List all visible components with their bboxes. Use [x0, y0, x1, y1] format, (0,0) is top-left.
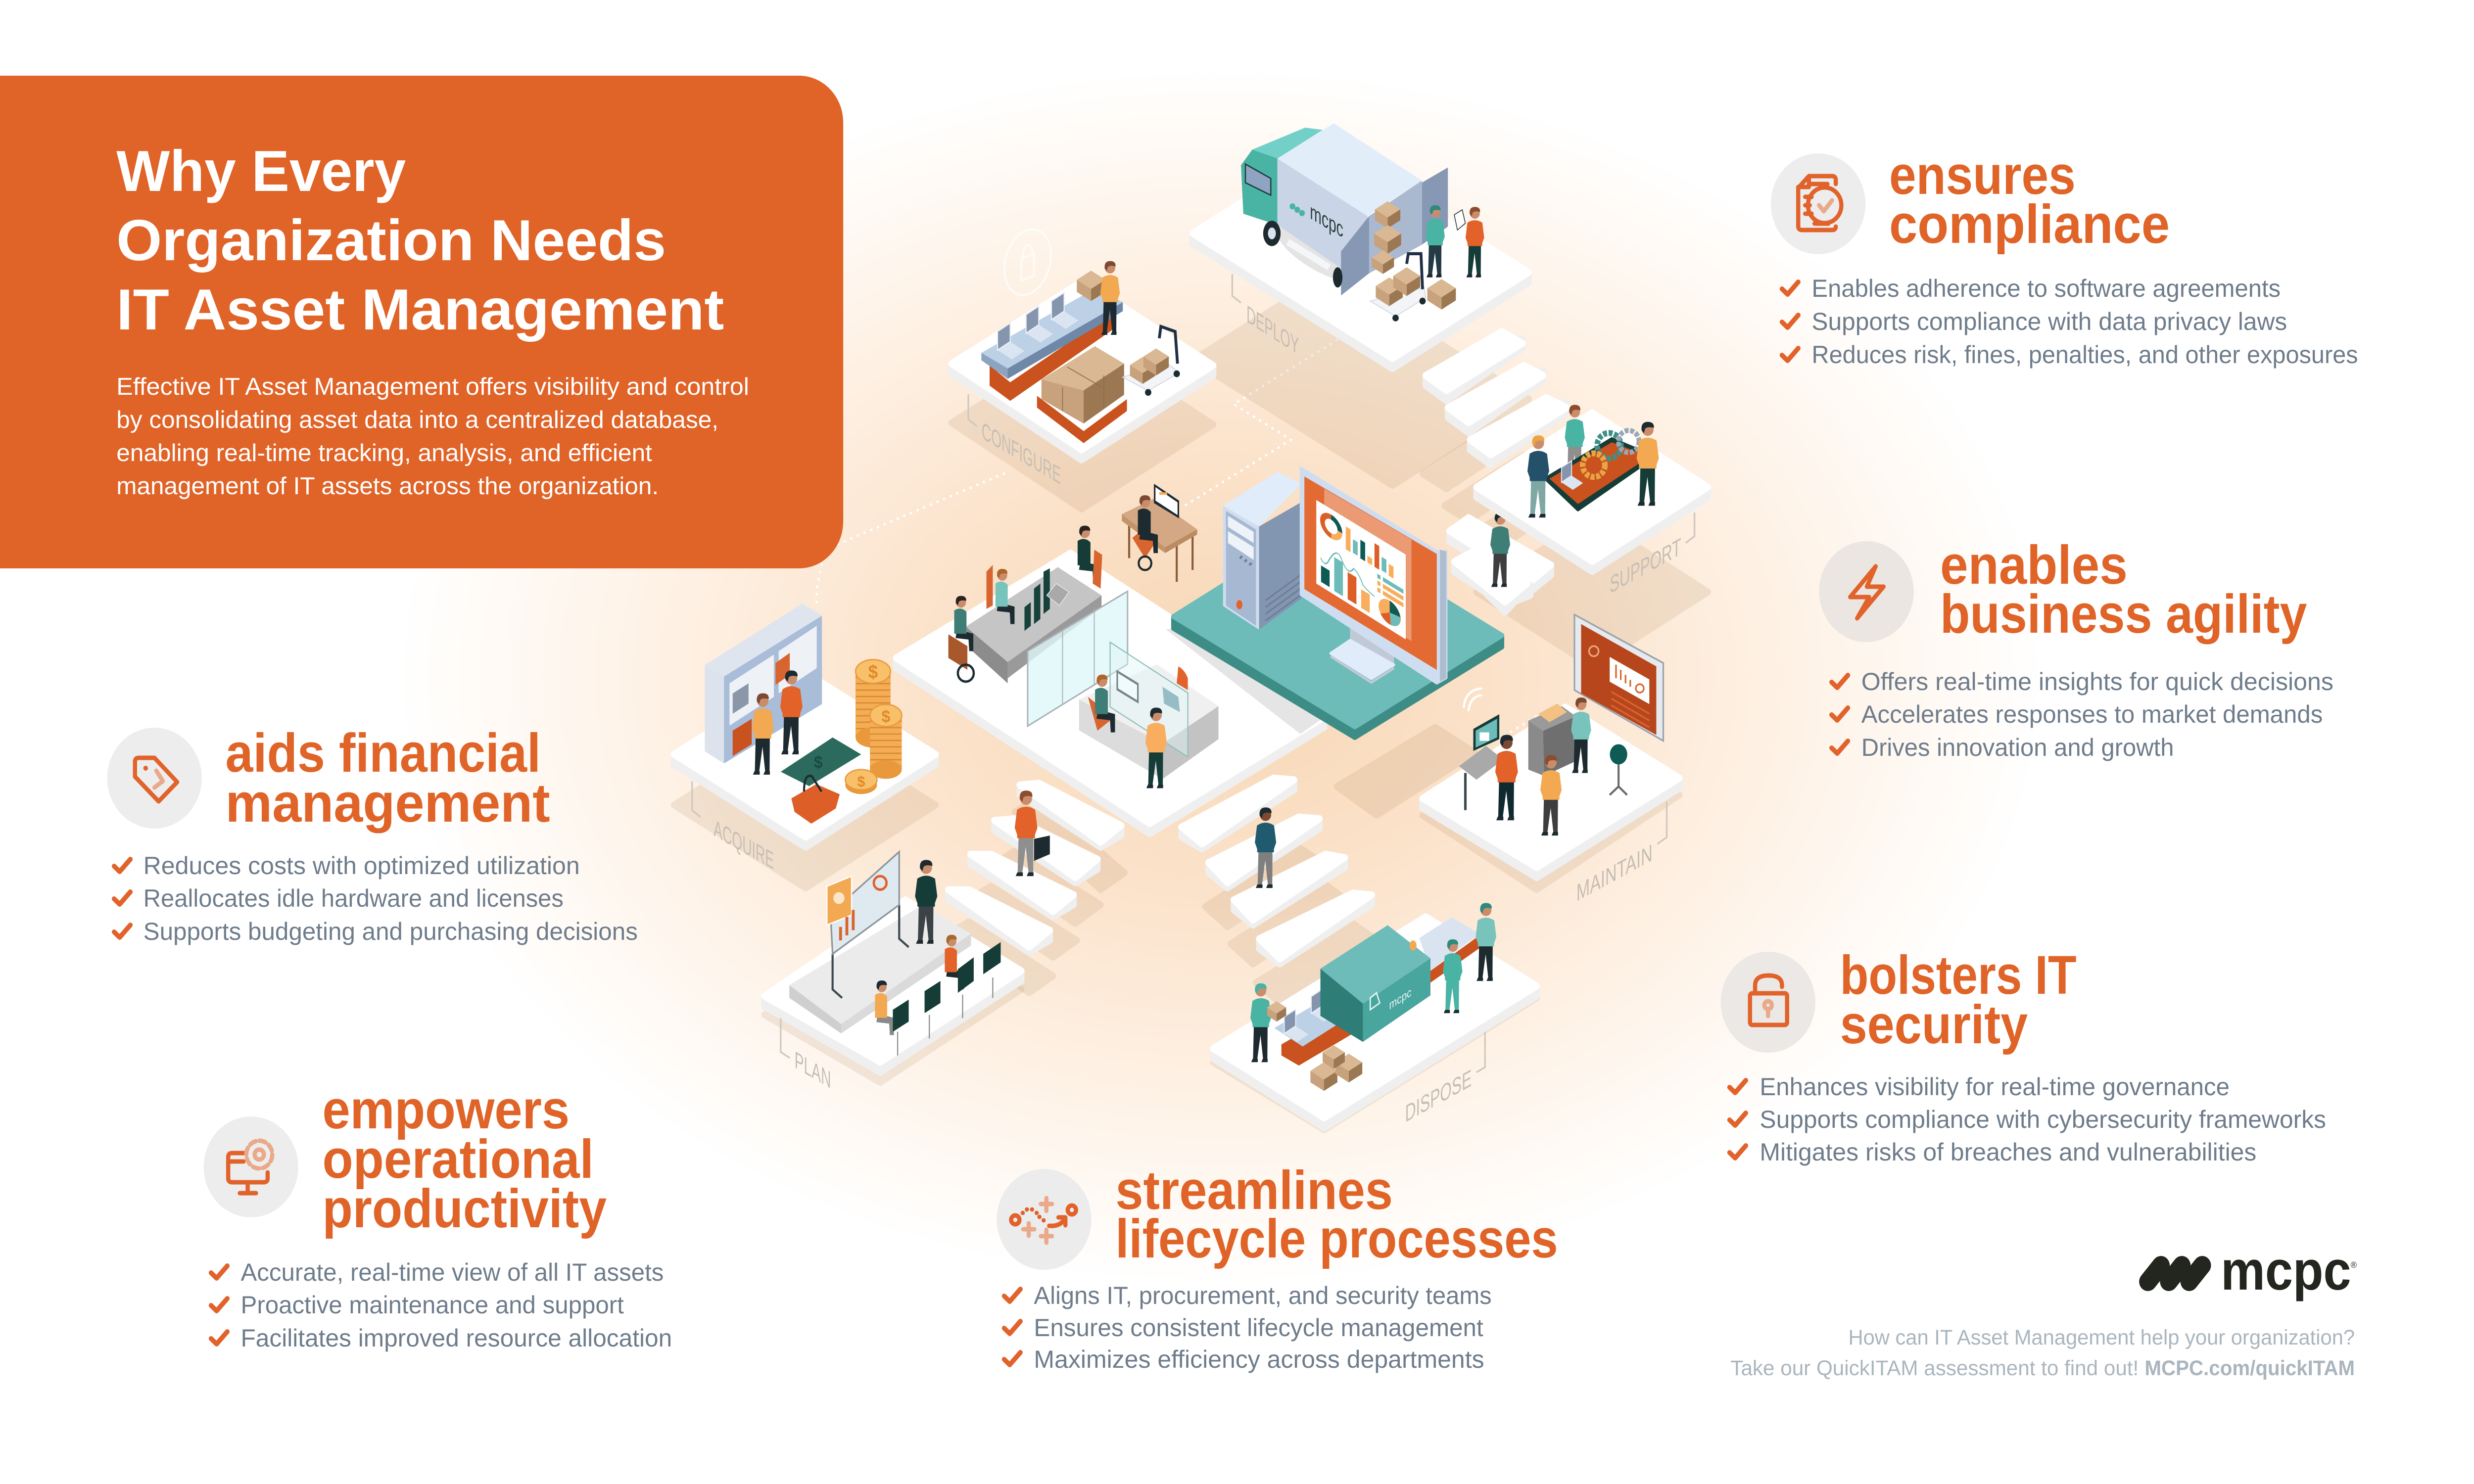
worker — [1100, 261, 1120, 335]
shared desk — [949, 526, 1102, 683]
output conveyor — [1420, 918, 1479, 983]
platform: office — [896, 484, 1324, 834]
panel: empowers operational productivity — [204, 1079, 672, 1352]
step label: support: SUPPORT — [1610, 533, 1681, 599]
heading — [1840, 944, 2077, 1055]
printer cabinet — [1528, 703, 1576, 776]
heading: bolsters IT — [1840, 944, 2077, 1006]
man behind tablet — [1565, 405, 1585, 480]
call to action: MCPC.com/quickITAM — [2144, 1356, 2355, 1380]
checklist: Proactive maintenance and support — [241, 1292, 624, 1319]
truck — [1241, 123, 1448, 295]
checklist: Ensures consistent lifecycle management — [1034, 1314, 1483, 1342]
call to action: How can IT Asset Management help your organization? — [1848, 1325, 2355, 1349]
checklist: Accelerates responses to market demands — [1861, 701, 2323, 728]
icon: process path — [997, 1169, 1092, 1270]
title: Why Every — [116, 139, 406, 204]
standing desk — [1459, 714, 1503, 810]
heading: compliance — [1889, 193, 2170, 255]
checklist: Facilitates improved resource allocation — [241, 1325, 672, 1352]
step label: maintain: MAINTAIN — [1576, 839, 1653, 907]
panel: bolsters IT security — [1721, 944, 2326, 1166]
title: Organization Needs — [116, 208, 666, 273]
checklist: Supports budgeting and purchasing decisions — [143, 918, 638, 945]
storage shelf — [705, 603, 822, 775]
heading — [1889, 144, 2170, 255]
reception desk — [1079, 642, 1218, 788]
title — [116, 139, 724, 342]
heading: lifecycle processes — [1115, 1208, 1558, 1269]
checklist: Enables adherence to software agreements — [1811, 275, 2281, 302]
wall display — [1574, 615, 1664, 741]
connecting dotted lines — [817, 340, 1546, 739]
audience seats — [875, 935, 1000, 1056]
platform: plan — [764, 852, 1021, 1072]
central server and monitor — [1174, 468, 1502, 738]
platform: support — [1476, 405, 1708, 572]
heading: aids financial — [226, 722, 541, 784]
checklist — [211, 1259, 672, 1352]
heading — [1940, 534, 2307, 645]
truck: mcpc — [1310, 198, 1343, 242]
icon: monitor and gear — [204, 1116, 298, 1217]
step label: configure — [968, 394, 1061, 490]
platform: maintain — [1423, 615, 1679, 878]
checklist: Drives innovation and growth — [1861, 734, 2174, 761]
heading: business agility — [1940, 583, 2307, 645]
wifi arcs — [1464, 689, 1481, 710]
panel: streamlines lifecycle processes — [997, 1159, 1558, 1373]
banknote and basket: $ — [814, 753, 823, 772]
hand cart — [1123, 326, 1180, 396]
step label: plan: PLAN — [795, 1046, 831, 1094]
checklist — [1730, 1073, 2326, 1166]
platform: dispose — [1213, 903, 1537, 1128]
step label: configure: CONFIGURE — [982, 417, 1061, 490]
icon: lightning bolt — [1819, 541, 1914, 642]
faint security icon — [997, 223, 1058, 302]
tablet with gears — [1546, 430, 1654, 510]
pallet of boxes — [1037, 346, 1127, 443]
heading: security — [1840, 994, 2028, 1055]
panel: intro — [0, 76, 843, 568]
coin stacks: $ — [868, 661, 878, 682]
hand cart with boxes — [1370, 254, 1456, 322]
step label: dispose: DISPOSE — [1405, 1064, 1472, 1128]
checklist: Reallocates idle hardware and licenses — [143, 885, 564, 912]
intro text: management of IT assets across the organization. — [116, 473, 659, 500]
logo: mcpc — [2148, 1240, 2357, 1302]
platform: configure — [952, 261, 1213, 460]
recycling machine — [1321, 925, 1430, 1042]
recycling workers — [1250, 903, 1496, 1062]
icon: open padlock — [1721, 952, 1815, 1053]
heading: productivity — [322, 1178, 607, 1239]
dashboard screen — [1304, 476, 1437, 670]
intro text — [116, 373, 749, 500]
recycling machine: mcpc — [1389, 985, 1412, 1013]
people — [1426, 205, 1484, 278]
icon: price tag — [107, 728, 202, 829]
teal base — [1174, 524, 1502, 738]
input conveyor — [1274, 981, 1358, 1066]
intro text: by consolidating asset data into a centralized database, — [116, 407, 718, 433]
icon: document with check — [1771, 153, 1865, 254]
glass partition — [1028, 591, 1128, 726]
banknote and basket — [781, 738, 861, 824]
team — [1527, 422, 1659, 517]
technicians — [1495, 697, 1591, 835]
checklist: Maximizes efficiency across departments — [1034, 1346, 1484, 1373]
wooden desk with monitor — [1122, 484, 1197, 582]
step label: acquire: ACQUIRE — [714, 814, 774, 875]
coin stacks: $ — [881, 707, 890, 726]
logo: mcpc: ® — [2351, 1259, 2357, 1270]
checklist — [1782, 275, 2358, 369]
step label: acquire — [692, 782, 774, 875]
checklist: Supports compliance with data privacy laws — [1811, 308, 2287, 335]
teal base floor shadow — [1166, 626, 1324, 734]
checklist — [1004, 1282, 1492, 1373]
call to action: Take our QuickITAM assessment to find out! — [1730, 1356, 2139, 1380]
heading: empowers — [322, 1079, 570, 1140]
checklist: Mitigates risks of breaches and vulnerabilities — [1760, 1139, 2256, 1166]
step label: deploy — [1232, 274, 1299, 360]
checklist — [1832, 668, 2333, 761]
heading: management — [226, 772, 550, 834]
checklist: Supports compliance with cybersecurity frameworks — [1760, 1106, 2326, 1133]
heading: operational — [322, 1128, 594, 1190]
platform shadows — [674, 274, 1708, 1130]
intro text: Effective IT Asset Management offers visibility and control — [116, 373, 749, 400]
panel: aids financial management — [107, 722, 638, 945]
step label: plan — [781, 1018, 831, 1094]
intro text: enabling real-time tracking, analysis, and efficient — [116, 440, 652, 466]
conveyor with laptops — [981, 271, 1123, 401]
logo: mcpc: mcpc — [2221, 1240, 2351, 1302]
panel: ensures compliance — [1771, 144, 2358, 369]
coin stacks: $ — [857, 773, 865, 790]
checklist — [114, 852, 638, 945]
isometric lifecycle illustration — [674, 123, 1708, 1130]
heading: enables — [1940, 534, 2128, 596]
panel: enables business agility — [1819, 534, 2333, 761]
platform: acquire — [674, 603, 936, 847]
checklist: Accurate, real-time view of all IT assets — [241, 1259, 664, 1286]
checklist: Enhances visibility for real-time governance — [1760, 1073, 2230, 1101]
presentation board — [827, 852, 937, 998]
checklist: Reduces costs with optimized utilization — [143, 852, 580, 880]
checklist: Reduces risk, fines, penalties, and other exposures — [1811, 341, 2358, 369]
heading — [226, 722, 550, 834]
walking employees — [1015, 512, 1510, 888]
heading — [1115, 1159, 1558, 1269]
step label: deploy: DEPLOY — [1246, 300, 1299, 360]
heading: ensures — [1889, 144, 2076, 206]
heading — [322, 1079, 607, 1239]
meeting table — [789, 905, 971, 1033]
stool — [1610, 744, 1627, 795]
desktop monitor — [1301, 468, 1446, 683]
call to action — [1730, 1325, 2355, 1380]
checklist: Aligns IT, procurement, and security teams — [1034, 1282, 1492, 1309]
heading: streamlines — [1115, 1159, 1393, 1221]
title: IT Asset Management — [116, 278, 724, 342]
coin stacks — [845, 659, 902, 794]
cardboard boxes — [1310, 1045, 1362, 1091]
step bars — [949, 331, 1567, 964]
server tower — [1223, 472, 1301, 630]
checklist: Offers real-time insights for quick decisions — [1861, 668, 2333, 696]
platform: deploy — [1192, 123, 1529, 369]
